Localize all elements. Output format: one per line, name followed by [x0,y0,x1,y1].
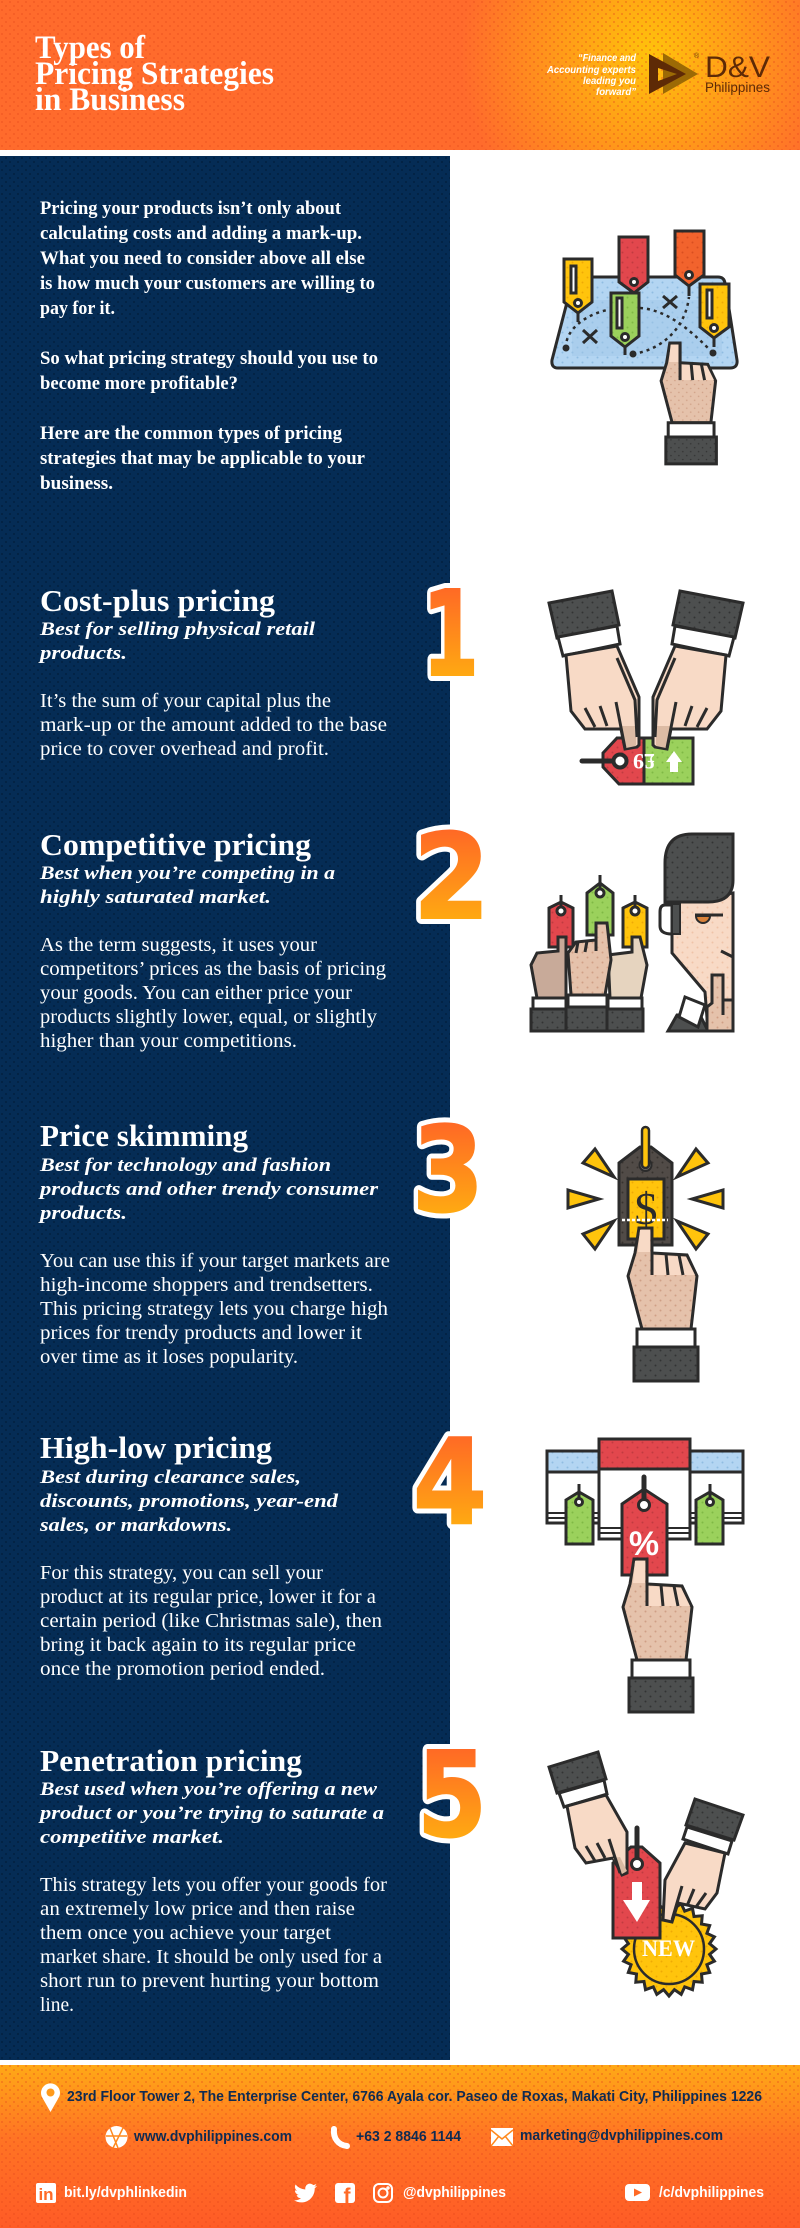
icon: hands placing price-down tag over NEW seal [549,1752,743,1996]
title: Types of [35,30,146,66]
icon: instagram [374,2184,392,2202]
tagline: forward” [596,86,637,98]
body text 5: market share. It should be only used for a [40,1947,382,1968]
icon: globe [106,2126,128,2148]
intro text: So what pricing strategy should you use to [40,349,378,369]
body text 5: line. [40,1995,74,2016]
heading: price skimming: Price skimming [40,1118,248,1153]
icon: facebook: f [344,2185,352,2208]
body text 4: product at its regular price, lower it for a [40,1587,376,1608]
icon: twitter [294,2184,317,2202]
body text 2: As the term suggests, it uses your [40,935,318,956]
section 2: competitive pricing [39,827,386,1052]
icon: email [491,2128,513,2146]
number 2: 2 [413,808,490,946]
navy panel [0,156,450,2060]
body text 4: bring it back again to its regular price [40,1635,356,1656]
intro text: Here are the common types of pricing [40,424,343,444]
icon: three hands pointing at tags beside thinking man [531,834,733,1031]
tagline: Accounting experts [546,64,636,76]
body text 1: mark-up or the amount added to the base [40,715,387,736]
logo: D&V Philippines [649,51,770,95]
number 1: 1 [422,565,479,703]
number 4: 4 [413,1413,487,1551]
body text 3: prices for trendy products and lower it [40,1323,363,1344]
subheading 2 [39,863,336,908]
number 2: 2 [413,808,490,946]
body text 4: For this strategy, you can sell your [40,1563,324,1584]
body text 5: This strategy lets you offer your goods for [40,1875,388,1896]
NEW label: NEW [642,1936,695,1961]
icon: shining price tag with hand: $ [634,1183,658,1234]
body text 1 [40,691,387,760]
body text 3: You can use this if your target markets are [40,1251,390,1272]
body text 3 [40,1251,390,1368]
subheading 3: products and other trendy consumer [38,1179,379,1200]
title: Pricing Strategies [35,56,274,92]
intro text: become more profitable? [40,374,238,394]
body text 2: products slightly lower, equal, or slightly [40,1007,377,1028]
icon: facebook [335,2183,355,2208]
body text 3: over time as it loses popularity. [40,1347,298,1368]
thinking man [660,834,733,1031]
address: 23rd Floor Tower 2, The Enterprise Center, 6766 Ayala cor. Paseo de Roxas, Makati City, Philippines 1226 [67,2088,762,2105]
footer band [0,2065,800,2228]
right hand [663,1799,743,1922]
body text 2: higher than your competitions. [40,1031,297,1052]
intro text: is how much your customers are willing to [40,274,375,294]
icon: linkedin [36,2183,56,2204]
body text 5: short run to prevent hurting your bottom [40,1971,379,1992]
section 3: price skimming [38,1118,390,1368]
body text 4: certain period (like Christmas sale), then [40,1611,382,1632]
tagline [546,52,637,98]
left hand [549,1752,627,1875]
number 3: 3 [412,1101,484,1239]
icon: web pages with discount tag and hand [547,1439,743,1712]
intro text: business. [40,474,113,494]
heading: cost-plus pricing: Cost-plus pricing [40,583,276,618]
icon: shining price tag with hand [568,1127,723,1381]
price-down tag [613,1828,660,1938]
section 1: cost-plus pricing [38,583,387,760]
phone number: +63 2 8846 1144 [356,2128,462,2145]
logo: D&V Philippines: D&V [705,51,770,84]
email address: marketing@dvphilippines.com [520,2127,723,2144]
icon: two hands pinching price tag: £9 [633,749,655,774]
website: www.dvphilippines.com [133,2128,292,2145]
number 5: 5 [417,1726,487,1864]
subheading 1 [38,619,316,664]
intro text: Pricing your products isn’t only about [40,199,342,219]
subheading 3: products. [38,1203,127,1224]
subheading 4: sales, or markdowns. [39,1515,232,1536]
icon: two hands pinching price tag [549,591,743,784]
subheading 3: Best for technology and fashion [39,1155,331,1176]
body text 3: This pricing strategy lets you charge high [40,1299,388,1320]
body text 5: an extremely low price and then raise [40,1899,355,1920]
subheading 4: discounts, promotions, year-end [40,1491,339,1512]
number 5: 5 [417,1726,487,1864]
body text 1: It’s the sum of your capital plus the [40,691,331,712]
intro text [40,199,378,494]
body text 2 [40,935,386,1052]
logo: D&V Philippines: ® [694,52,700,60]
number 4: 4 [413,1413,487,1551]
icon: linkedin: in [38,2185,54,2204]
body text 5: them once you achieve your target [40,1923,332,1944]
intro text: strategies that may be applicable to your [40,449,365,469]
section 4: high-low pricing [39,1430,382,1680]
icon: web pages with discount tag and hand: % [629,1525,659,1563]
subheading 5 [38,1779,385,1848]
heading: high-low pricing: High-low pricing [40,1430,273,1465]
subheading 5: competitive market. [40,1827,224,1848]
social handle: @dvphilippines [403,2184,506,2201]
logo: D&V Philippines: Philippines [705,79,770,95]
heading: penetration pricing: Penetration pricing [40,1743,303,1778]
subheading 2: highly saturated market. [40,887,271,908]
icon: youtube [625,2184,650,2201]
header band [0,0,800,150]
tagline: leading you [583,75,637,87]
number 3: 3 [412,1101,484,1239]
title [35,30,274,118]
intro text: What you need to consider above all else [40,249,365,269]
subheading 1: products. [38,643,127,664]
body text 3: high-income shoppers and trendsetters. [40,1275,373,1296]
intro text: pay for it. [40,299,115,319]
right hand [607,937,647,1031]
subheading 3 [38,1155,379,1224]
number 1: 1 [422,565,479,703]
section 5: penetration pricing [38,1743,388,2016]
body text 5 [40,1875,388,2016]
heading: competitive pricing: Competitive pricing [40,827,312,862]
subheading 5: Best used when you’re offering a new [39,1779,377,1800]
subheading 5: product or you’re trying to saturate a [38,1803,385,1824]
subheading 2: Best when you’re competing in a [39,863,336,884]
body text 1: price to cover overhead and profit. [40,739,329,760]
icon: map with price tags and hand [552,231,737,464]
number 1 [422,565,479,703]
icon: phone [334,2129,347,2146]
subheading 4 [39,1467,339,1536]
body text 4 [40,1563,382,1680]
body text 4: once the promotion period ended. [40,1659,325,1680]
left hand [531,937,566,1031]
body text 2: competitors’ prices as the basis of pricing [40,959,386,980]
tagline: “Finance and [578,52,637,64]
subheading 1: Best for selling physical retail [39,619,316,640]
linkedin link: bit.ly/dvphlinkedin [64,2184,187,2201]
centre hand [566,923,611,1031]
icon: location pin [41,2083,60,2112]
intro text: calculating costs and adding a mark-up. [40,224,362,244]
youtube channel: /c/dvphilippines [659,2184,764,2201]
subheading 4: Best during clearance sales, [39,1467,301,1488]
body text 2: your goods. You can either price your [40,983,353,1004]
title: in Business [35,82,185,118]
NEW seal [622,1902,716,1996]
tags [549,875,647,947]
